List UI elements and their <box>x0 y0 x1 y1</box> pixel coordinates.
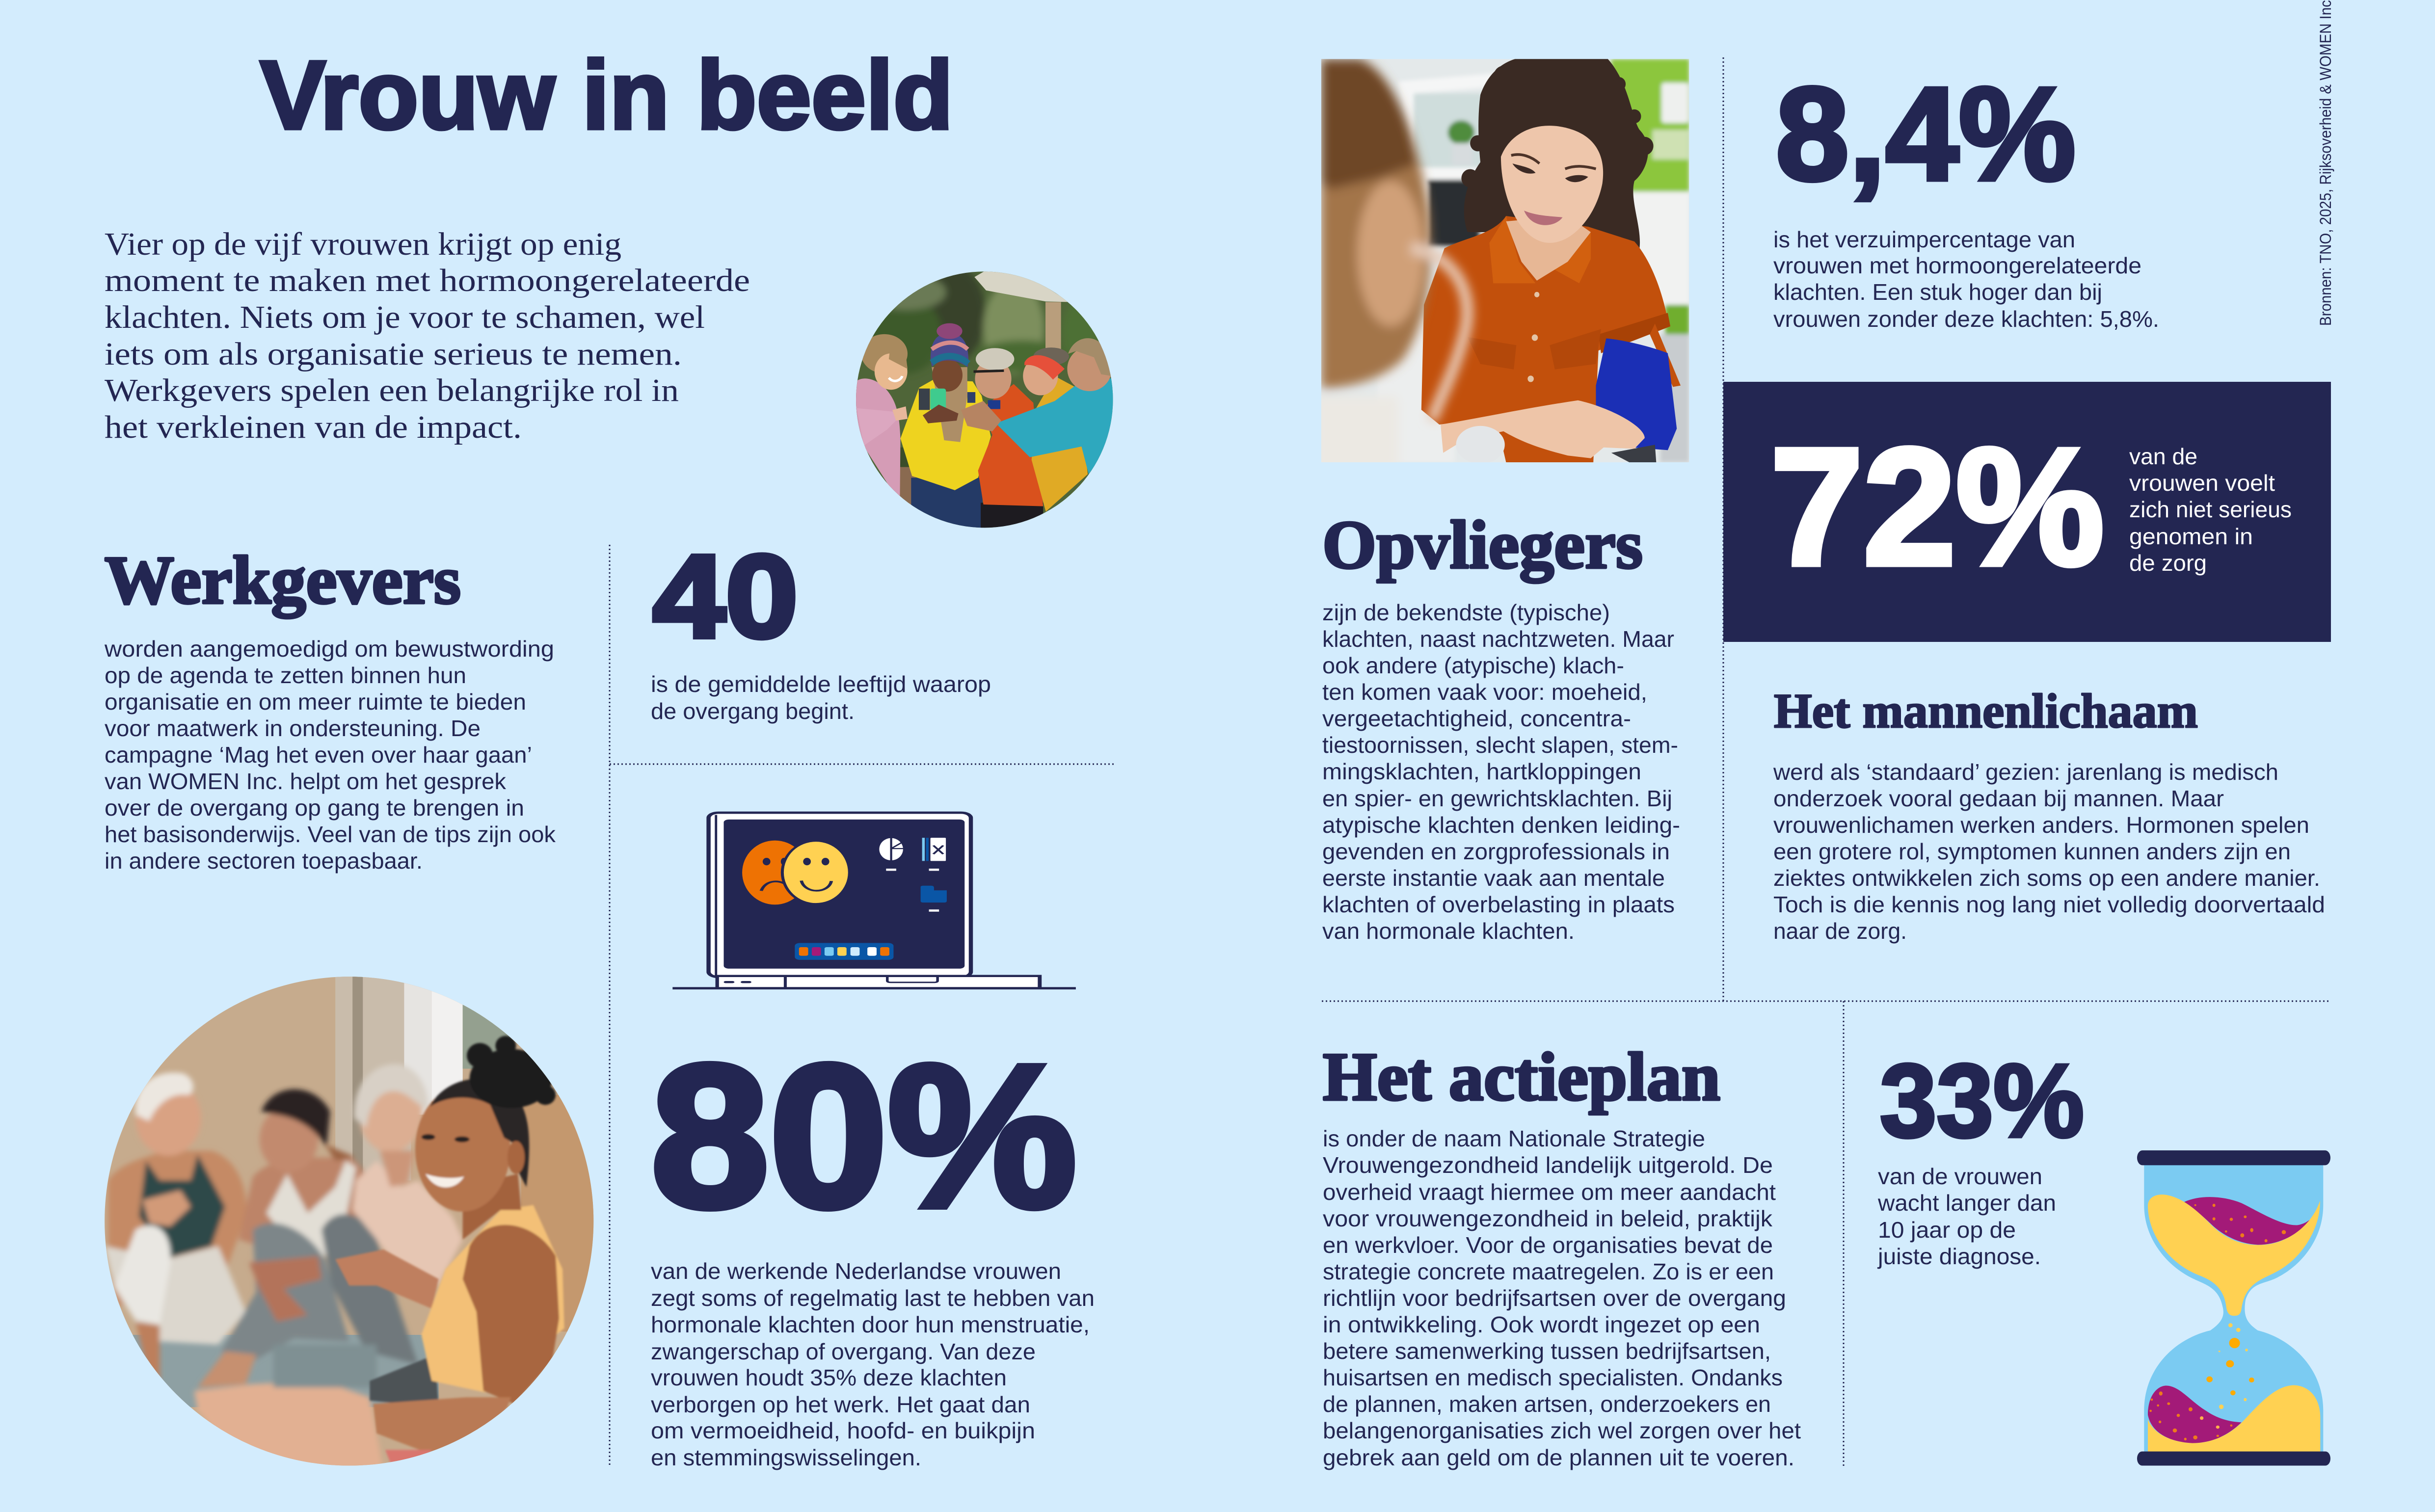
text: Opvliegers body: zijn de bekendste (typische) <box>1322 600 1610 625</box>
text: Het actieplan body: overheid vraagt hiermee om meer aandacht <box>1323 1179 1776 1205</box>
heading: Het mannenlichaam: Het mannenlichaam <box>1774 684 2198 738</box>
text: Het actieplan body: en werkvloer. Voor de organisaties bevat de <box>1323 1232 1773 1258</box>
intro text: Werkgevers spelen een belangrijke rol in <box>105 372 679 408</box>
text: Het actieplan body: betere samenwerking tussen bedrijfsartsen, <box>1323 1338 1771 1364</box>
text: Werkgevers body: voor maatwerk in ondersteuning. De <box>105 716 481 741</box>
text: Werkgevers body <box>104 636 556 874</box>
icon: laptop with sad and happy faces <box>672 812 1076 989</box>
panel: 72% callout <box>1723 382 2331 642</box>
text: 80% body: om vermoeidheid, hoofd- en buikpijn <box>651 1418 1035 1443</box>
stat: 33%: 10 jaar op de <box>1878 1217 2016 1243</box>
intro text: iets om als organisatie serieus te nemen. <box>105 336 682 372</box>
text: Opvliegers body: tiestoornissen, slecht slapen, stem- <box>1322 732 1678 758</box>
text: 80% body: zegt soms of regelmatig last te hebben van <box>651 1285 1095 1311</box>
stat: 33%: 33% <box>1880 1042 2084 1159</box>
stat: 40: is de gemiddelde leeftijd waarop <box>651 671 991 697</box>
text: Opvliegers body: mingsklachten, hartkloppingen <box>1322 759 1641 784</box>
text: Opvliegers body: ook andere (atypische) klach- <box>1322 653 1624 678</box>
text: Het mannenlichaam body: een grotere rol, symptomen kunnen anders zijn en <box>1773 839 2291 864</box>
stat: 8,4%: vrouwen met hormoongerelateerde <box>1773 253 2141 278</box>
text: Het actieplan body: strategie concrete maatregelen. Zo is er een <box>1323 1259 1774 1284</box>
text: 72% description: van de <box>2129 444 2197 469</box>
photo: group of women outdoors <box>856 271 1113 528</box>
text: Het actieplan body: huisartsen en medisch specialisten. Ondanks <box>1323 1365 1783 1390</box>
text: Het mannenlichaam body: naar de zorg. <box>1773 918 1907 944</box>
panel: Werkgevers <box>104 542 556 874</box>
stat: 80%: 80% <box>651 1022 1077 1249</box>
stat: 40: 40 <box>653 531 798 662</box>
panel: Het actieplan <box>1323 1039 1801 1470</box>
intro text: moment te maken met hormoongerelateerde <box>105 263 750 298</box>
text: Het mannenlichaam body <box>1773 759 2325 944</box>
intro text <box>105 226 750 445</box>
text: Werkgevers body: op de agenda te zetten binnen hun <box>105 663 466 688</box>
text: 80% body: verborgen op het werk. Het gaat dan <box>651 1392 1030 1417</box>
text: Het actieplan body: voor vrouwengezondheid in beleid, praktijk <box>1323 1206 1773 1231</box>
stat: 33% <box>1877 1042 2084 1269</box>
text: 80% body: en stemmingswisselingen. <box>651 1445 921 1470</box>
intro text: klachten. Niets om je voor te schamen, wel <box>105 299 705 335</box>
text: Het actieplan body: gebrek aan geld om de plannen uit te voeren. <box>1323 1445 1794 1470</box>
text: Opvliegers body: eerste instantie vaak aan mentale <box>1322 865 1665 891</box>
text: Het actieplan body: in ontwikkeling. Ook wordt ingezet op een <box>1323 1312 1760 1337</box>
photo: women at yoga class <box>105 977 594 1465</box>
stat: 8,4% <box>1773 60 2159 332</box>
icon: hourglass <box>2137 1150 2330 1466</box>
text: 80% body: hormonale klachten door hun menstruatie, <box>651 1312 1090 1337</box>
text: 72% description: zich niet serieus <box>2129 497 2292 522</box>
text: Het actieplan body: belangenorganisaties zich wel zorgen over het <box>1323 1418 1801 1443</box>
text: Het mannenlichaam body: onderzoek vooral gedaan bij mannen. Maar <box>1773 786 2224 811</box>
text: Werkgevers body: organisatie en om meer ruimte te bieden <box>105 689 526 715</box>
text: Werkgevers body: worden aangemoedigd om bewustwording <box>104 636 554 662</box>
text: Het mannenlichaam body: ziektes ontwikkelen zich soms op een andere manier. <box>1773 865 2320 891</box>
text: Opvliegers body: atypische klachten denken leiding- <box>1322 812 1680 838</box>
title: Vrouw in beeld <box>260 41 953 149</box>
text: Het mannenlichaam body: Toch is die kennis nog lang niet volledig doorvertaald <box>1773 892 2325 917</box>
text: Werkgevers body: in andere sectoren toepasbaar. <box>105 848 423 874</box>
heading: Opvliegers: Opvliegers <box>1322 507 1643 583</box>
text: Werkgevers body: over de overgang op gang te brengen in <box>105 795 524 821</box>
stat: 72%: 72% <box>1770 414 2104 600</box>
intro text: Vier op de vijf vrouwen krijgt op enig <box>105 226 621 262</box>
text: Opvliegers body: van hormonale klachten. <box>1322 918 1575 944</box>
text: 72% description: de zorg <box>2129 550 2207 576</box>
text: Het actieplan body: richtlijn voor bedrijfsartsen over de overgang <box>1323 1285 1786 1311</box>
text: Opvliegers body: vergeetachtigheid, concentra- <box>1322 706 1631 731</box>
text: 72% description <box>2129 444 2292 576</box>
text: 80% body: vrouwen houdt 35% deze klachten <box>651 1365 1007 1390</box>
stat: 40: de overgang begint. <box>651 698 855 724</box>
panel: Opvliegers <box>1322 507 1680 944</box>
heading: Het actieplan: Het actieplan <box>1323 1039 1720 1115</box>
text: 80% body: van de werkende Nederlandse vrouwen <box>651 1258 1061 1284</box>
text: Werkgevers body: het basisonderwijs. Veel van de tips zijn ook <box>105 822 556 847</box>
stat: 33%: wacht langer dan <box>1877 1190 2056 1216</box>
stat: 8,4%: vrouwen zonder deze klachten: 5,8%. <box>1773 306 2159 332</box>
text: Het actieplan body: Vrouwengezondheid landelijk uitgerold. De <box>1323 1152 1773 1178</box>
text: 72% description: vrouwen voelt <box>2129 470 2275 496</box>
text: Het actieplan body <box>1323 1126 1801 1470</box>
text: Werkgevers body: van WOMEN Inc. helpt om het gesprek <box>105 769 507 794</box>
text: 80% body <box>651 1258 1095 1470</box>
text: Het actieplan body: de plannen, maken artsen, onderzoekers en <box>1323 1391 1771 1417</box>
stat: 33%: van de vrouwen <box>1878 1164 2042 1189</box>
text: Opvliegers body: gevenden en zorgprofessionals in <box>1322 839 1670 864</box>
text: Het mannenlichaam body: werd als ‘standaard’ gezien: jarenlang is medisch <box>1773 759 2278 785</box>
text: Het mannenlichaam body: vrouwenlichamen werken anders. Hormonen spelen <box>1773 812 2309 838</box>
stat: 8,4%: is het verzuimpercentage van <box>1773 227 2075 252</box>
text: Werkgevers body: campagne ‘Mag het even over haar gaan’ <box>105 742 532 768</box>
intro text: het verkleinen van de impact. <box>105 409 522 445</box>
text: Opvliegers body: klachten of overbelasting in plaats <box>1322 892 1675 917</box>
stat: 40 <box>651 531 991 724</box>
stat: 33%: juiste diagnose. <box>1877 1244 2041 1269</box>
text: Opvliegers body <box>1322 600 1680 944</box>
photo: doctor measuring blood pressure <box>1316 57 1689 472</box>
text: Opvliegers body: klachten, naast nachtzweten. Maar <box>1322 626 1674 652</box>
text: Opvliegers body: ten komen vaak voor: moeheid, <box>1322 679 1647 705</box>
panel: Het mannenlichaam <box>1773 684 2325 944</box>
text: 80% body: zwangerschap of overgang. Van deze <box>651 1339 1036 1364</box>
heading: Werkgevers: Werkgevers <box>105 542 461 618</box>
stat: 8,4%: 8,4% <box>1776 60 2076 208</box>
stat: 80% <box>651 1022 1095 1470</box>
text: 72% description: genomen in <box>2129 524 2253 549</box>
text: Opvliegers body: en spier- en gewrichtsklachten. Bij <box>1322 786 1672 811</box>
text: Het actieplan body: is onder de naam Nationale Strategie <box>1323 1126 1705 1151</box>
stat: 8,4%: klachten. Een stuk hoger dan bij <box>1773 279 2102 305</box>
